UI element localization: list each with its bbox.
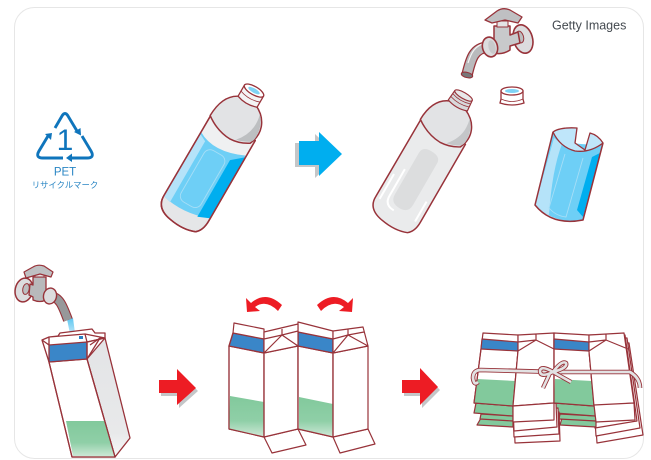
cap bbox=[237, 85, 264, 109]
arrow: red first bbox=[159, 369, 198, 408]
illustration: full water bottle bbox=[155, 74, 279, 237]
four carton panels bbox=[474, 333, 518, 406]
white band bbox=[198, 117, 254, 162]
icon: PET recycling mark: リサイクルマーク bbox=[32, 180, 98, 190]
green liquid bbox=[66, 421, 115, 457]
illustration: bottle cap bbox=[500, 87, 524, 105]
illustration: faucet lower with water bbox=[13, 265, 75, 334]
icon: PET recycling mark: 1 bbox=[57, 124, 73, 157]
arrow: curved red left bbox=[246, 297, 282, 312]
illustration: faucet upper bbox=[461, 9, 536, 79]
string bbox=[473, 362, 640, 388]
white stacked flaps bbox=[514, 412, 560, 443]
top flaps bbox=[233, 323, 264, 339]
illustration: empty bottle bbox=[367, 80, 488, 238]
blue bands bbox=[229, 333, 264, 353]
carton top bbox=[42, 329, 105, 345]
arrow: blue with grey shadow bbox=[295, 132, 342, 178]
bottom flaps bbox=[264, 429, 306, 453]
shoulder dome bbox=[205, 88, 270, 150]
icon: PET recycling mark bbox=[32, 114, 98, 190]
carton front bbox=[49, 359, 115, 457]
illustration: cut bottle label sleeve bbox=[535, 128, 603, 221]
illustration: tilted milk carton bbox=[42, 329, 130, 457]
credit text: Getty Images: Getty Images bbox=[552, 18, 626, 32]
illustration: bundled cartons tied with string bbox=[473, 333, 643, 443]
illustration: opened carton bbox=[229, 322, 375, 453]
icon: PET recycling mark: PET bbox=[54, 166, 76, 178]
blue band bbox=[49, 342, 87, 362]
arrow: curved red right bbox=[317, 297, 353, 312]
stacked green layers bbox=[477, 418, 513, 427]
water stream bbox=[67, 318, 75, 334]
water bbox=[163, 130, 246, 224]
back layers right edge bbox=[590, 340, 643, 443]
arrow: red second bbox=[402, 368, 440, 408]
bottle body bbox=[155, 115, 255, 237]
carton side bbox=[87, 338, 130, 457]
panels bbox=[229, 346, 264, 437]
